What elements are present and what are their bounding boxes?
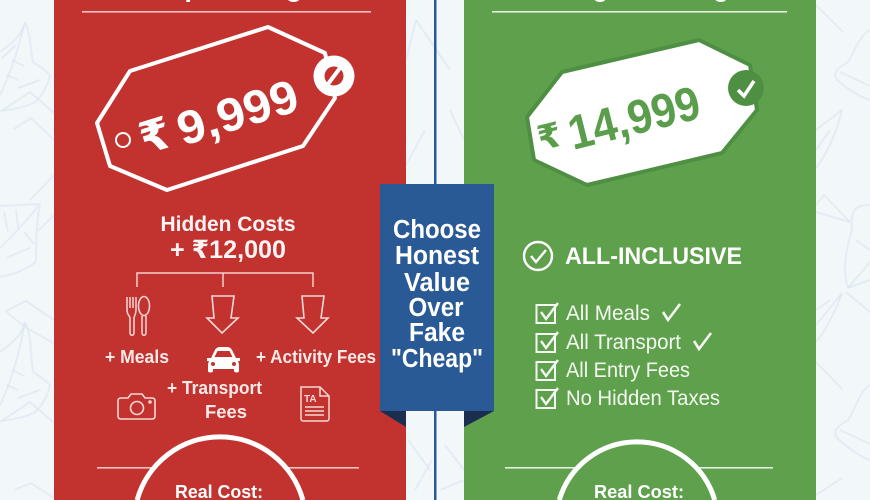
banner text: Fake <box>409 319 465 347</box>
icon: down arrow <box>207 296 238 333</box>
item: all meals <box>536 302 680 325</box>
banner text: Honest <box>395 242 479 270</box>
price tag: 9,999 <box>97 27 354 190</box>
icon: down arrow <box>297 296 328 333</box>
icon: tax document: TA <box>304 394 317 405</box>
item: all transport <box>536 331 711 354</box>
icon: camera <box>118 394 155 419</box>
bracket connector <box>137 273 313 287</box>
label: meals: + Meals <box>105 347 169 367</box>
panel: honest package (green) <box>464 0 816 500</box>
banner text: Choose <box>393 216 481 244</box>
price tag: 14,999: 14,999 <box>563 77 706 161</box>
center divider line <box>434 0 436 500</box>
banner text: Over <box>408 294 464 322</box>
item: no hidden taxes: No Hidden Taxes <box>566 387 720 410</box>
price tag: 9,999: 9,999 <box>170 69 305 156</box>
banner text: "Cheap" <box>391 345 483 373</box>
item: all transport: All Transport <box>566 331 681 354</box>
label: transport fees <box>167 378 262 422</box>
hidden costs heading: + ₹12,000 <box>170 236 286 264</box>
item: all meals: All Meals <box>566 302 650 325</box>
real cost badge <box>137 437 303 500</box>
icon: tax document <box>301 387 329 421</box>
item: all entry fees: All Entry Fees <box>566 359 690 382</box>
heading rule <box>82 11 371 13</box>
heading rule <box>492 11 787 13</box>
icon: fork and spoon <box>127 296 150 335</box>
footer rule <box>505 467 773 469</box>
banner text <box>391 216 483 373</box>
checklist <box>536 302 720 410</box>
footer rule <box>97 467 359 469</box>
all-inclusive heading: ALL-INCLUSIVE <box>565 243 742 270</box>
price tag: 14,999 <box>527 40 764 185</box>
panel: cheap package (red) <box>54 0 406 500</box>
price tag: 14,999: ₹ <box>533 116 566 158</box>
real cost badge <box>559 442 715 500</box>
center ribbon banner <box>380 184 494 427</box>
label: activity fees: + Activity Fees <box>256 347 376 367</box>
hidden costs heading: Hidden Costs <box>160 213 296 236</box>
label: transport fees: + Transport <box>167 378 262 398</box>
hidden costs heading <box>160 213 296 264</box>
icon: car <box>207 347 240 372</box>
banner text: Value <box>404 269 470 297</box>
price tag: 9,999: ₹ <box>133 108 177 164</box>
label: transport fees: Fees <box>205 402 247 422</box>
